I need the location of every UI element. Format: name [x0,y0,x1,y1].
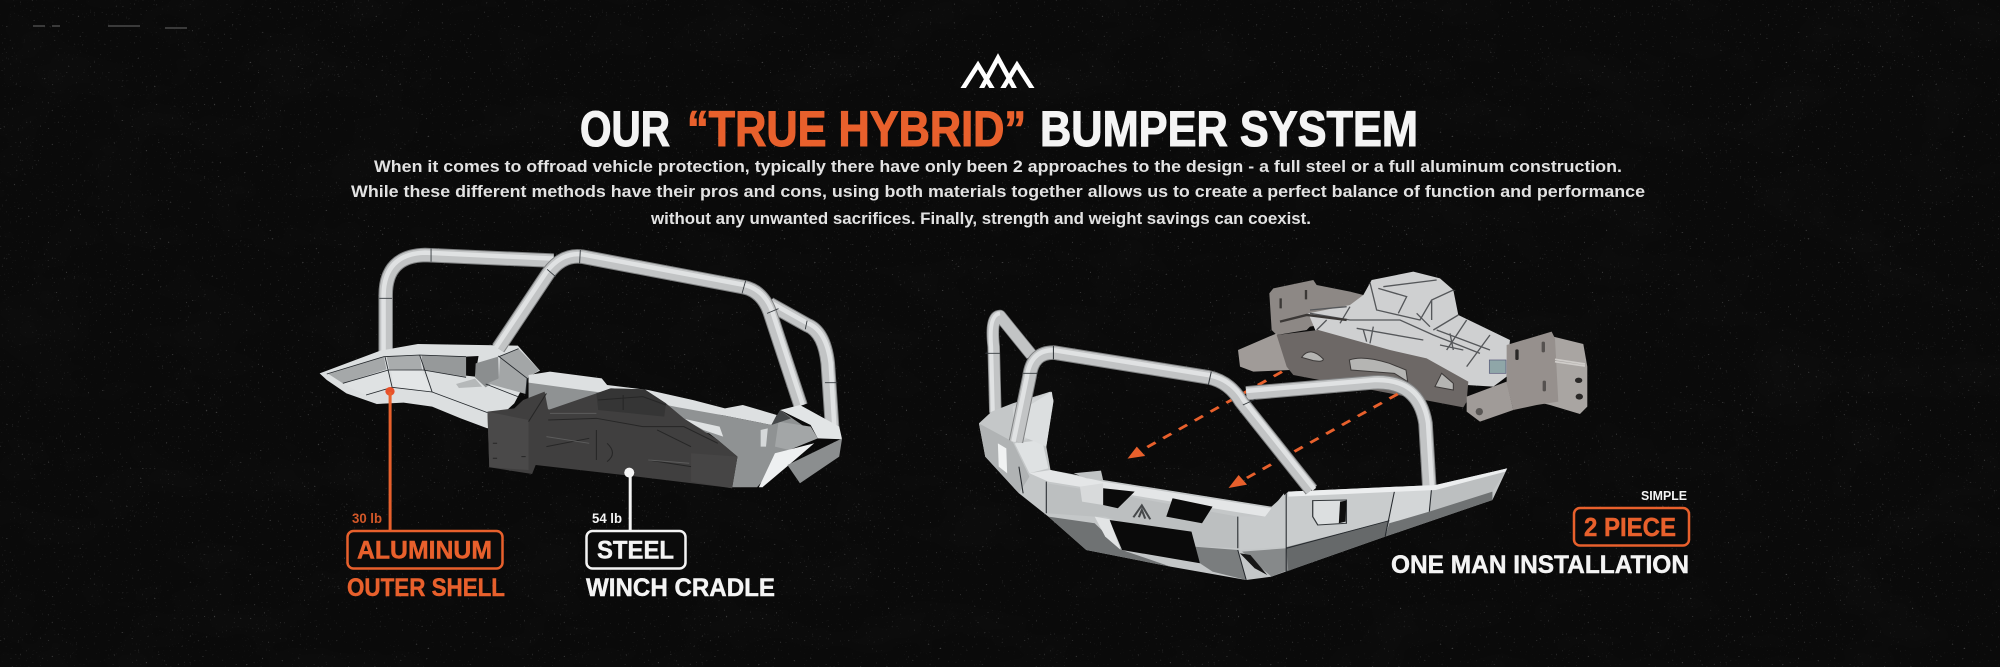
caption: outer shell: OUTER SHELL [347,574,505,602]
left bumper illustration [320,248,842,488]
right mounting plate [1507,332,1587,414]
bumper shell white top [320,344,540,428]
callout leader: steel [629,473,632,531]
tube: main hoop [379,248,837,406]
badge: aluminum [348,531,502,568]
arrow: upper dashed [1128,372,1282,459]
badge: steel: STEEL [597,536,674,564]
inner end bracket [1023,392,1053,447]
winch body [1308,272,1510,387]
centre top plate [529,372,777,425]
right bumper illustration [979,313,1507,580]
caption: winch cradle: WINCH CRADLE [586,574,775,602]
icon: mountain logo [960,58,1035,93]
callout dot: steel [624,468,634,478]
centre inner wall [529,380,725,437]
winch cradle dark [487,388,737,488]
left plate slots [1280,290,1347,322]
tube: left hoop [384,253,554,352]
left bracket [1238,333,1290,372]
intro paragraph: While these different methods have their pros and cons, using both materials together allows us to create a perfect balance of function and performance [351,182,1645,201]
left mounting plate [1269,280,1363,335]
tube: third hoop rear [770,302,835,437]
intro paragraph: without any unwanted sacrifices. Finally, strength and weight savings can coexist. [650,209,1311,228]
plate cut-outs [1302,352,1453,390]
arrow: lower dashed [1229,394,1398,488]
shell inner faces [327,349,539,413]
callout dot: aluminum [385,387,395,396]
callout leader: aluminum [389,392,392,531]
badge: 2 piece: 2 PIECE [1584,512,1676,542]
title [580,101,1418,157]
label: two piece installation [1391,488,1689,579]
tube: front main hoop [985,346,1314,490]
title: “TRUE HYBRID” [687,101,1026,157]
label: aluminum outer shell [347,510,505,602]
winch cradle exploded illustration [1238,272,1587,422]
badge: 2 piece [1574,508,1689,546]
title: BUMPER SYSTEM [1040,101,1418,157]
badge: aluminum: ALUMINUM [357,536,492,564]
bumper faces [979,392,1507,580]
weight: 54 lb: 54 lb [592,510,622,526]
right end plate [679,405,842,487]
intro paragraph [351,157,1645,228]
label: steel winch cradle [586,510,775,602]
winch detail lines [1310,280,1490,367]
bumper openings [998,443,1346,563]
caption: one man installation: ONE MAN INSTALLATION [1391,551,1689,579]
right bracket [1467,382,1513,422]
tube: rear right hoop [1246,380,1432,487]
bumper logo mark [1133,505,1150,519]
tube: rear left hoop [991,313,1032,413]
weight: 30 lb: 30 lb [352,510,382,526]
badge: steel [586,531,686,568]
eyebrow: simple: SIMPLE [1641,488,1687,503]
dark side plate [1277,330,1468,407]
label sticker [1489,360,1506,373]
bumper body [979,392,1507,580]
intro paragraph: When it comes to offroad vehicle protection, typically there have only been 2 approaches to the design - a full steel or a full aluminum construction. [374,157,1622,176]
title: OUR [580,101,670,157]
